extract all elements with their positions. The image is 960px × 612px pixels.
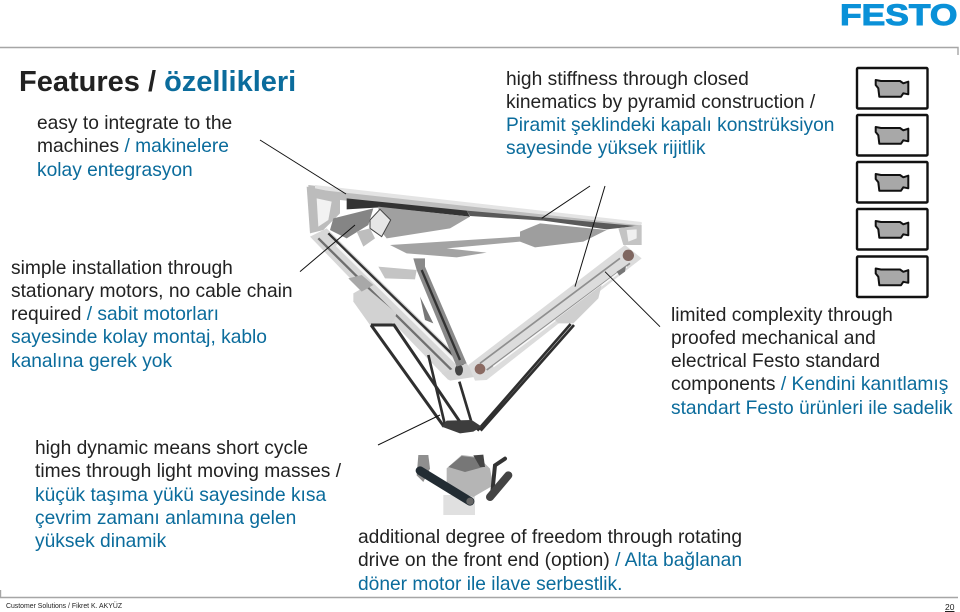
text block: simple installation: kanalına gerek yok xyxy=(11,351,172,372)
text block: easy to integrate: kolay entegrasyon xyxy=(37,160,193,181)
text block: high dynamic: high dynamic means short cycle xyxy=(35,438,308,459)
top frame bar xyxy=(307,185,642,245)
mounting plates xyxy=(330,207,607,257)
text block: high stiffness: sayesinde yüksek rijitlik xyxy=(506,138,705,159)
text block: high dynamic xyxy=(35,438,342,552)
text block: high stiffness: Piramit şeklindeki kapalı konstrüksiyon xyxy=(506,115,834,136)
text block: high stiffness: high stiffness through closed xyxy=(506,68,749,90)
text block: limited complexity: standart Festo ürünleri ile sadelik xyxy=(671,398,953,419)
text block: easy to integrate xyxy=(37,113,232,181)
left arm xyxy=(310,228,477,381)
moving platform xyxy=(442,420,482,433)
footer: author: Customer Solutions / Fikret K. AKYÜZ xyxy=(6,603,122,610)
text block: limited complexity xyxy=(671,304,953,419)
image: rotating drive option xyxy=(416,454,512,515)
dark parallel rods xyxy=(371,324,574,432)
text block: high stiffness: kinematics by pyramid construction / xyxy=(506,92,815,113)
text block: high stiffness xyxy=(506,68,834,159)
right arm xyxy=(468,245,642,381)
text block: simple installation: sayesinde kolay montaj, kablo xyxy=(11,327,267,348)
text block: limited complexity: components / Kendini kanıtlamış xyxy=(671,374,948,395)
text block: limited complexity: electrical Festo standard xyxy=(671,351,880,372)
text block: additional degree of freedom: döner motor ile ilave serbestlik. xyxy=(358,574,622,595)
text block: easy to integrate: easy to integrate to the xyxy=(37,113,232,134)
text block: simple installation: stationary motors, no cable chain xyxy=(11,281,293,302)
text block: easy to integrate: machines / makinelere xyxy=(37,136,229,157)
text block: simple installation xyxy=(11,258,293,372)
text block: additional degree of freedom xyxy=(358,527,742,595)
text block: additional degree of freedom: drive on the front end (option) / Alta bağlanan xyxy=(358,550,742,571)
diagram: tripod delta robot xyxy=(300,185,660,446)
leader lines xyxy=(300,186,660,445)
title: Features / özellikleri xyxy=(19,66,296,98)
rear arm xyxy=(378,258,467,367)
text block: high dynamic: küçük taşıma yükü sayesinde kısa xyxy=(35,485,326,506)
icon column: video cameras xyxy=(856,66,929,298)
text block: limited complexity: proofed mechanical and xyxy=(671,328,876,349)
text block: high dynamic: times through light moving masses / xyxy=(35,461,341,482)
text block: limited complexity: limited complexity through xyxy=(671,304,893,326)
text block: simple installation: required / sabit motorları xyxy=(11,304,219,325)
footer: page number: 20 xyxy=(945,602,954,612)
text block: simple installation: simple installation through xyxy=(11,258,233,278)
leader: top-left from easy to integrate xyxy=(260,140,346,194)
text block: additional degree of freedom: additional degree of freedom through rotating xyxy=(358,527,742,548)
text block: high dynamic: yüksek dinamik xyxy=(35,531,166,552)
text block: high dynamic: çevrim zamanı anlamına gelen xyxy=(35,508,296,529)
